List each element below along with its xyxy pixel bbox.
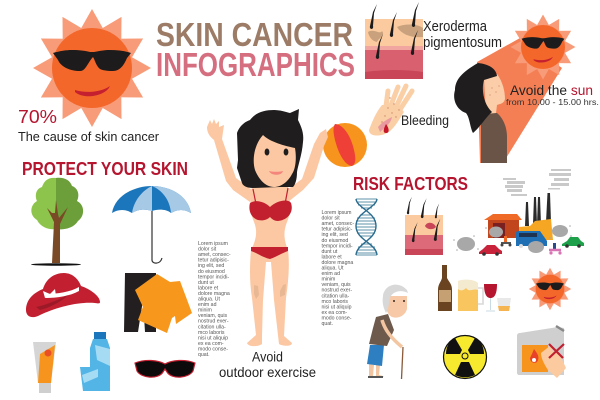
grey pollution clouds [453,225,572,251]
text block: left lorem ipsum: dolore magna [198,291,230,297]
canister [517,327,564,375]
label [522,345,548,372]
heading: protect your skin: PROTECT YOUR SKIN [22,158,188,179]
arms [207,119,252,202]
icon: old person with cane [367,285,408,379]
torso and legs [247,186,292,346]
icon: bleeding hand [369,86,412,136]
icon: flammable canister with hand [517,326,566,378]
text block: right lorem ipsum: Lorem ipsum [322,210,351,216]
icon: large sun with sunglasses [33,9,151,127]
icon: small sun [511,15,575,79]
text block: left lorem ipsum: labore et [198,285,219,291]
sun exposure scene [454,15,599,163]
text block: right lorem ipsum: modo conse- [322,315,352,321]
eyes and mouth [265,148,269,156]
text block: right lorem ipsum: do eiusmod [322,238,348,244]
text block: right lorem ipsum: ing elit, sed [322,232,348,238]
text block: right lorem ipsum: dolor sit [322,216,340,222]
text block: right lorem ipsum: amet, consec- [322,221,354,227]
text block: left lorem ipsum: ex ea com- [198,341,224,347]
arm [382,320,402,347]
icon: sunglasses [135,360,195,377]
shot glass [497,298,511,311]
label: bleeding: Bleeding [401,112,449,128]
text block: left lorem ipsum: amet, consec- [198,252,231,258]
text block: right lorem ipsum: veniam, quis [322,282,351,288]
text block: right lorem ipsum: minim [322,277,335,283]
text block: right lorem ipsum: aliqua. Ut [322,266,344,272]
text block: right lorem ipsum: dolore magna [322,260,353,266]
smoke [503,169,571,196]
text block: left lorem ipsum: nisi ut aliquip [198,335,228,341]
flame [530,349,538,363]
woman in profile [454,63,507,163]
label: xeroderma pigmentosum [423,18,502,51]
red car [479,245,502,254]
factory buildings [519,219,553,240]
text block: right lorem ipsum: mco laboris [322,299,348,305]
shorts [367,345,384,366]
wine bottle [438,265,452,311]
hand [541,345,566,378]
text block: left lorem ipsum: tempor incidi- [198,274,229,280]
text block: left lorem ipsum: do eiusmod [198,269,225,275]
text block: left lorem ipsum: minim [198,308,212,314]
text block: left lorem ipsum: nostrud exer- [198,319,229,325]
label: xeroderma pigmentosum: pigmentosum [423,34,502,51]
scooter [549,243,562,255]
text block: left lorem ipsum: citation ulla- [198,324,226,330]
face [385,296,407,318]
shirt [369,314,394,346]
cane [402,347,403,379]
beer mug [458,281,478,311]
icon: umbrella [112,186,191,263]
title line: skin cancer: SKIN CANCER [156,16,353,53]
statistic: 70 percent [18,106,160,144]
bikini [253,188,288,204]
text block: right lorem ipsum: tetur adipisic- [322,227,353,233]
text block: right lorem ipsum: tempor incidi- [322,243,353,249]
text block: right lorem ipsum: ex ea com- [322,310,347,316]
text block: right lorem ipsum: citation ulla- [322,293,349,299]
label: avoid outdoor exercise: Avoid [252,348,283,364]
green car [562,237,584,246]
icon: skin with mole [405,197,443,255]
text block: right lorem ipsum: nisi ut aliquip [322,304,352,310]
text block: right lorem ipsum: enim ad [322,271,340,277]
caption: The cause of skin cancer [18,129,160,144]
title [156,16,355,83]
text block: left lorem ipsum: Lorem ipsum [198,241,228,247]
chimneys [525,193,551,226]
icon: skin cross-section xeroderma [365,2,423,79]
woman in bikini with beach ball [207,109,367,346]
icon: water bottle and glass [80,332,110,391]
icon: clothes [124,273,192,333]
wine glass [484,284,497,298]
pants [124,273,156,332]
text block: right lorem ipsum: nostrud exer- [322,288,352,294]
text block: right lorem ipsum: quat. [322,321,333,327]
bus [516,231,547,246]
text block: left lorem ipsum: enim ad [198,302,217,308]
icon: sunscreen tube [33,342,56,393]
label: avoid outdoor exercise: outdoor exercise [219,364,316,380]
legs [369,364,384,377]
text block: left lorem ipsum: modo conse- [198,346,228,352]
red cross [549,344,564,358]
leg patches [254,284,286,299]
text block: right lorem ipsum: dunt ut [322,249,338,255]
label: hours: from 10.00 - 15.00 hrs. [506,97,599,107]
label: avoid outdoor exercise [219,348,316,380]
hair [383,285,408,313]
text block: left lorem ipsum: quat. [198,352,210,358]
text block: left lorem ipsum: mco laboris [198,330,225,336]
icon: tree [31,178,83,266]
title line: infographics: INFOGRAPHICS [156,46,355,83]
face [254,135,296,187]
text block: left lorem ipsum: aliqua. Ut [198,296,220,302]
icon: radiation symbol [444,336,486,378]
beach ball [323,123,367,167]
icon: factory and traffic pollution [453,169,584,256]
text block: left lorem ipsum: ing elit, sed [198,263,224,269]
text block: left lorem ipsum: tetur adipisic- [198,258,229,264]
motorbike [500,236,512,246]
icon: red hat [26,273,100,317]
label: avoid the sun: Avoid the sun [510,82,593,98]
heading: risk factors: RISK FACTORS [353,174,468,194]
text block: right lorem ipsum: labore et [322,254,342,260]
icon: small sun risk factor [529,268,571,310]
sun rays cone [477,38,562,163]
text block: left lorem ipsum: dunt ut [198,280,214,286]
text block: left lorem ipsum: veniam, quis [198,313,228,319]
icon: DNA helix [356,199,377,255]
text block: left lorem ipsum: dolor sit [198,247,217,253]
percentage: 70% [18,106,57,127]
orange shirt [135,274,192,333]
icon: alcohol [438,265,511,311]
label: xeroderma pigmentosum: Xeroderma [423,18,488,35]
hair back [237,109,303,188]
